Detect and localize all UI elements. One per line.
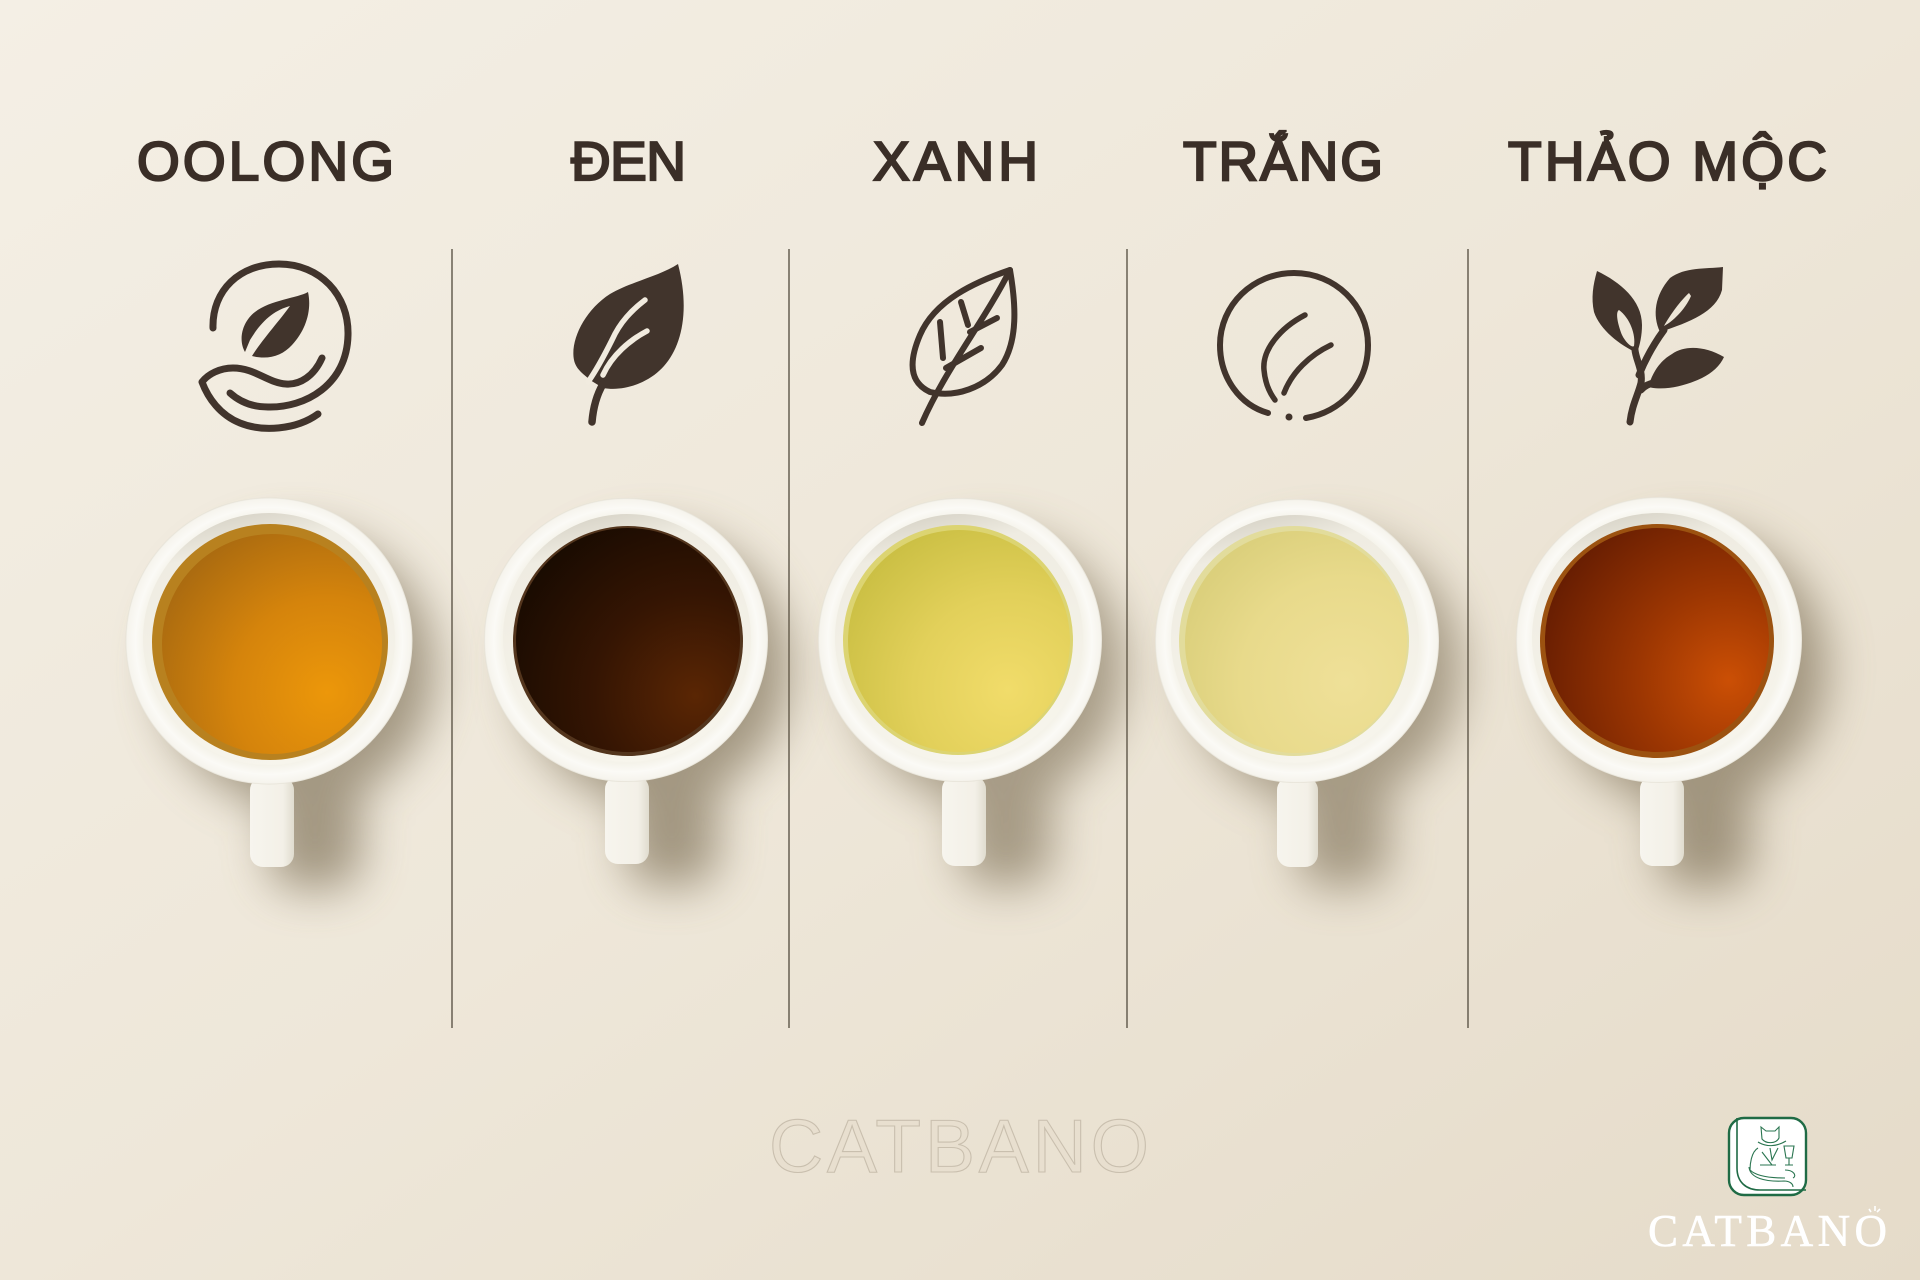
icon: white tea circle — [1220, 273, 1368, 420]
cup rim — [1155, 499, 1439, 783]
heading: OOLONG: OOLONG — [137, 130, 394, 192]
heading: ĐEN: ĐEN — [571, 130, 686, 192]
cup rim — [484, 498, 768, 782]
cup handle — [1277, 777, 1318, 867]
cup shadow — [1551, 530, 1827, 888]
logo wordmark: CATBANO — [1648, 1206, 1887, 1256]
cup inner well — [143, 513, 395, 765]
column dividers — [452, 249, 1468, 1028]
heading: THẢO MỘC: THẢO MỘC — [1508, 130, 1827, 192]
cup handle — [942, 776, 986, 866]
cup shadow — [518, 532, 790, 886]
cup inner well — [1532, 513, 1782, 763]
cup handle — [250, 777, 294, 867]
tea cup: oolong — [126, 498, 435, 889]
tea cup: thao moc — [1516, 497, 1827, 888]
icon: oolong leaf in circle with hand — [202, 264, 348, 428]
cup shadow — [852, 532, 1124, 886]
cup handle — [605, 776, 649, 864]
liquid — [1540, 524, 1774, 758]
icon: black tea solid leaf — [573, 264, 684, 422]
liquid — [1179, 526, 1409, 756]
logo mark: cat with tea — [1729, 1118, 1806, 1195]
icon: herbal three-leaf sprig — [1593, 267, 1724, 422]
cup inner well — [503, 514, 751, 762]
liquid — [513, 526, 743, 756]
cup rim — [818, 498, 1102, 782]
cup inner well — [1171, 515, 1419, 763]
liquid — [843, 525, 1073, 755]
embossed wordmark: CATBANO — [769, 1104, 1149, 1188]
liquid — [152, 524, 388, 760]
cup rim — [126, 498, 412, 784]
cup inner well — [835, 514, 1083, 762]
heading: TRẮNG: TRẮNG — [1183, 130, 1383, 192]
cup handle — [1640, 776, 1684, 866]
cup rim — [1516, 497, 1802, 783]
cup shadow — [159, 531, 435, 889]
tea cup: xanh — [818, 498, 1124, 886]
heading: XANH: XANH — [873, 130, 1038, 192]
icon: green tea outlined leaf — [913, 270, 1014, 423]
cup shadow — [1189, 533, 1461, 887]
tea cup: trang — [1155, 499, 1461, 887]
tea cup: den — [484, 498, 790, 886]
